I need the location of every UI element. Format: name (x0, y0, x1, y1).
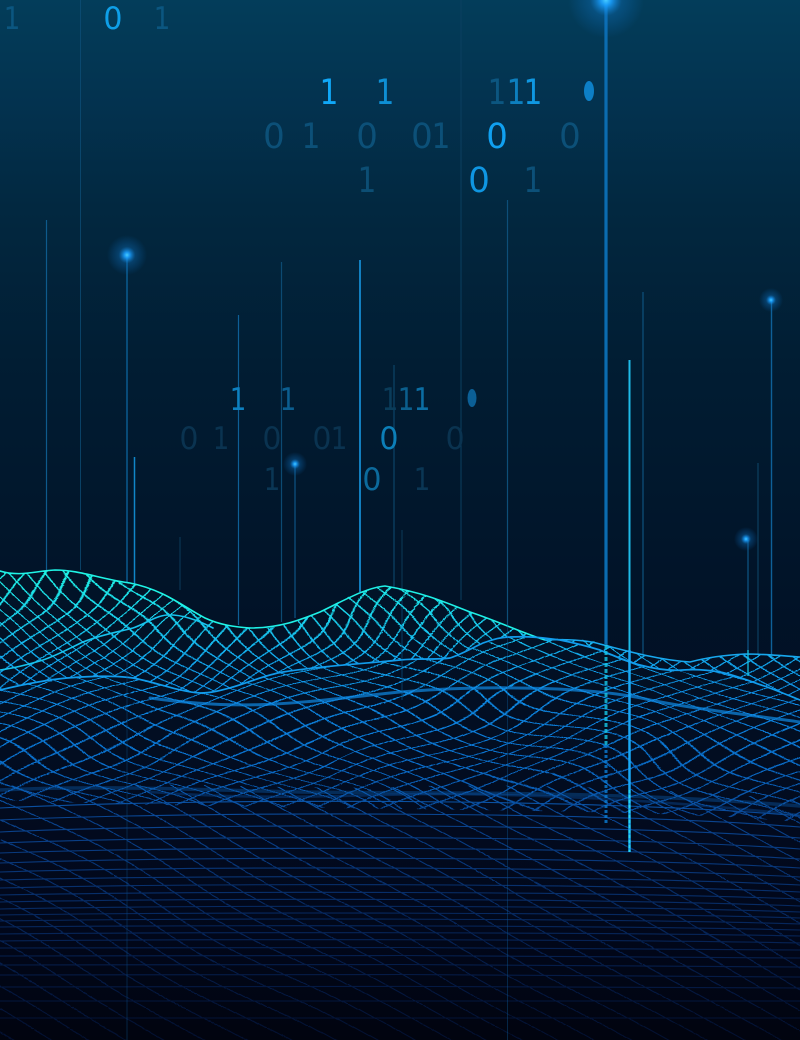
binary digits: lower block (179, 381, 476, 498)
terrain: foreground diagonals (0, 784, 800, 1040)
binary digits: lower block: 1 (414, 381, 430, 418)
binary digits: lower block: 1 (280, 381, 296, 418)
terrain: centre hill (222, 588, 526, 673)
terrain: back left hill (0, 571, 250, 669)
binary digits: upper block: 1 (358, 160, 376, 201)
binary digits: lower block: 1 (264, 461, 280, 498)
binary digits: lower block: 1 (213, 420, 229, 457)
binary digits: top left (4, 0, 170, 37)
binary digits: lower block: 0 (445, 422, 465, 457)
binary digits: lower block: 0 (179, 422, 199, 457)
binary digits: upper block: 0 (411, 117, 433, 157)
binary digits: lower block: 0 (362, 463, 382, 498)
binary digits: upper block (263, 72, 594, 201)
binary digits: upper block: 1 (432, 116, 450, 157)
binary digits: upper block: 0 (486, 117, 508, 157)
terrain: middle band (0, 638, 800, 821)
glow points (107, 0, 783, 551)
binary digits: lower block: 1 (414, 461, 430, 498)
binary digits: upper block: 1 (320, 72, 338, 113)
terrain: foreground cross lines (0, 801, 800, 1018)
terrain: middle left ridge (221, 632, 268, 649)
binary digits: upper block: 1 (524, 160, 542, 201)
binary digits: top left: 1 (154, 0, 170, 37)
binary digits: lower block: 0 (312, 422, 332, 457)
binary digits: lower block: 0 (262, 422, 282, 457)
binary digits: lower block: 1 (331, 420, 347, 457)
binary digits: upper block: 1 (524, 72, 542, 113)
binary digits: upper block: 1 (507, 72, 525, 113)
binary digits: upper block: 1 (488, 72, 506, 113)
binary digits: lower block: 1 (230, 381, 246, 418)
binary digits: lower block: 0 (379, 422, 399, 457)
binary digits: top left: 1 (4, 0, 20, 37)
binary digits: upper block: 1 (376, 72, 394, 113)
binary digits: upper block: 0 (559, 117, 581, 157)
binary digits: top left: 0 (103, 2, 123, 37)
vertical light lines (46, 0, 772, 670)
binary digits: upper block: 1 (302, 116, 320, 157)
terrain: ridge highlight lines (0, 570, 800, 815)
binary digits: lower block: 1 (382, 381, 398, 418)
vertical light lines over terrain (127, 600, 748, 1040)
terrain: right back ridge (556, 638, 800, 700)
wireframe terrain (0, 569, 800, 1040)
binary digits: upper block: 0 (263, 117, 285, 157)
binary digits: upper block: 0 (356, 117, 378, 157)
binary digits: upper block: 0 (468, 161, 490, 201)
binary digits: lower block: 1 (398, 381, 414, 418)
